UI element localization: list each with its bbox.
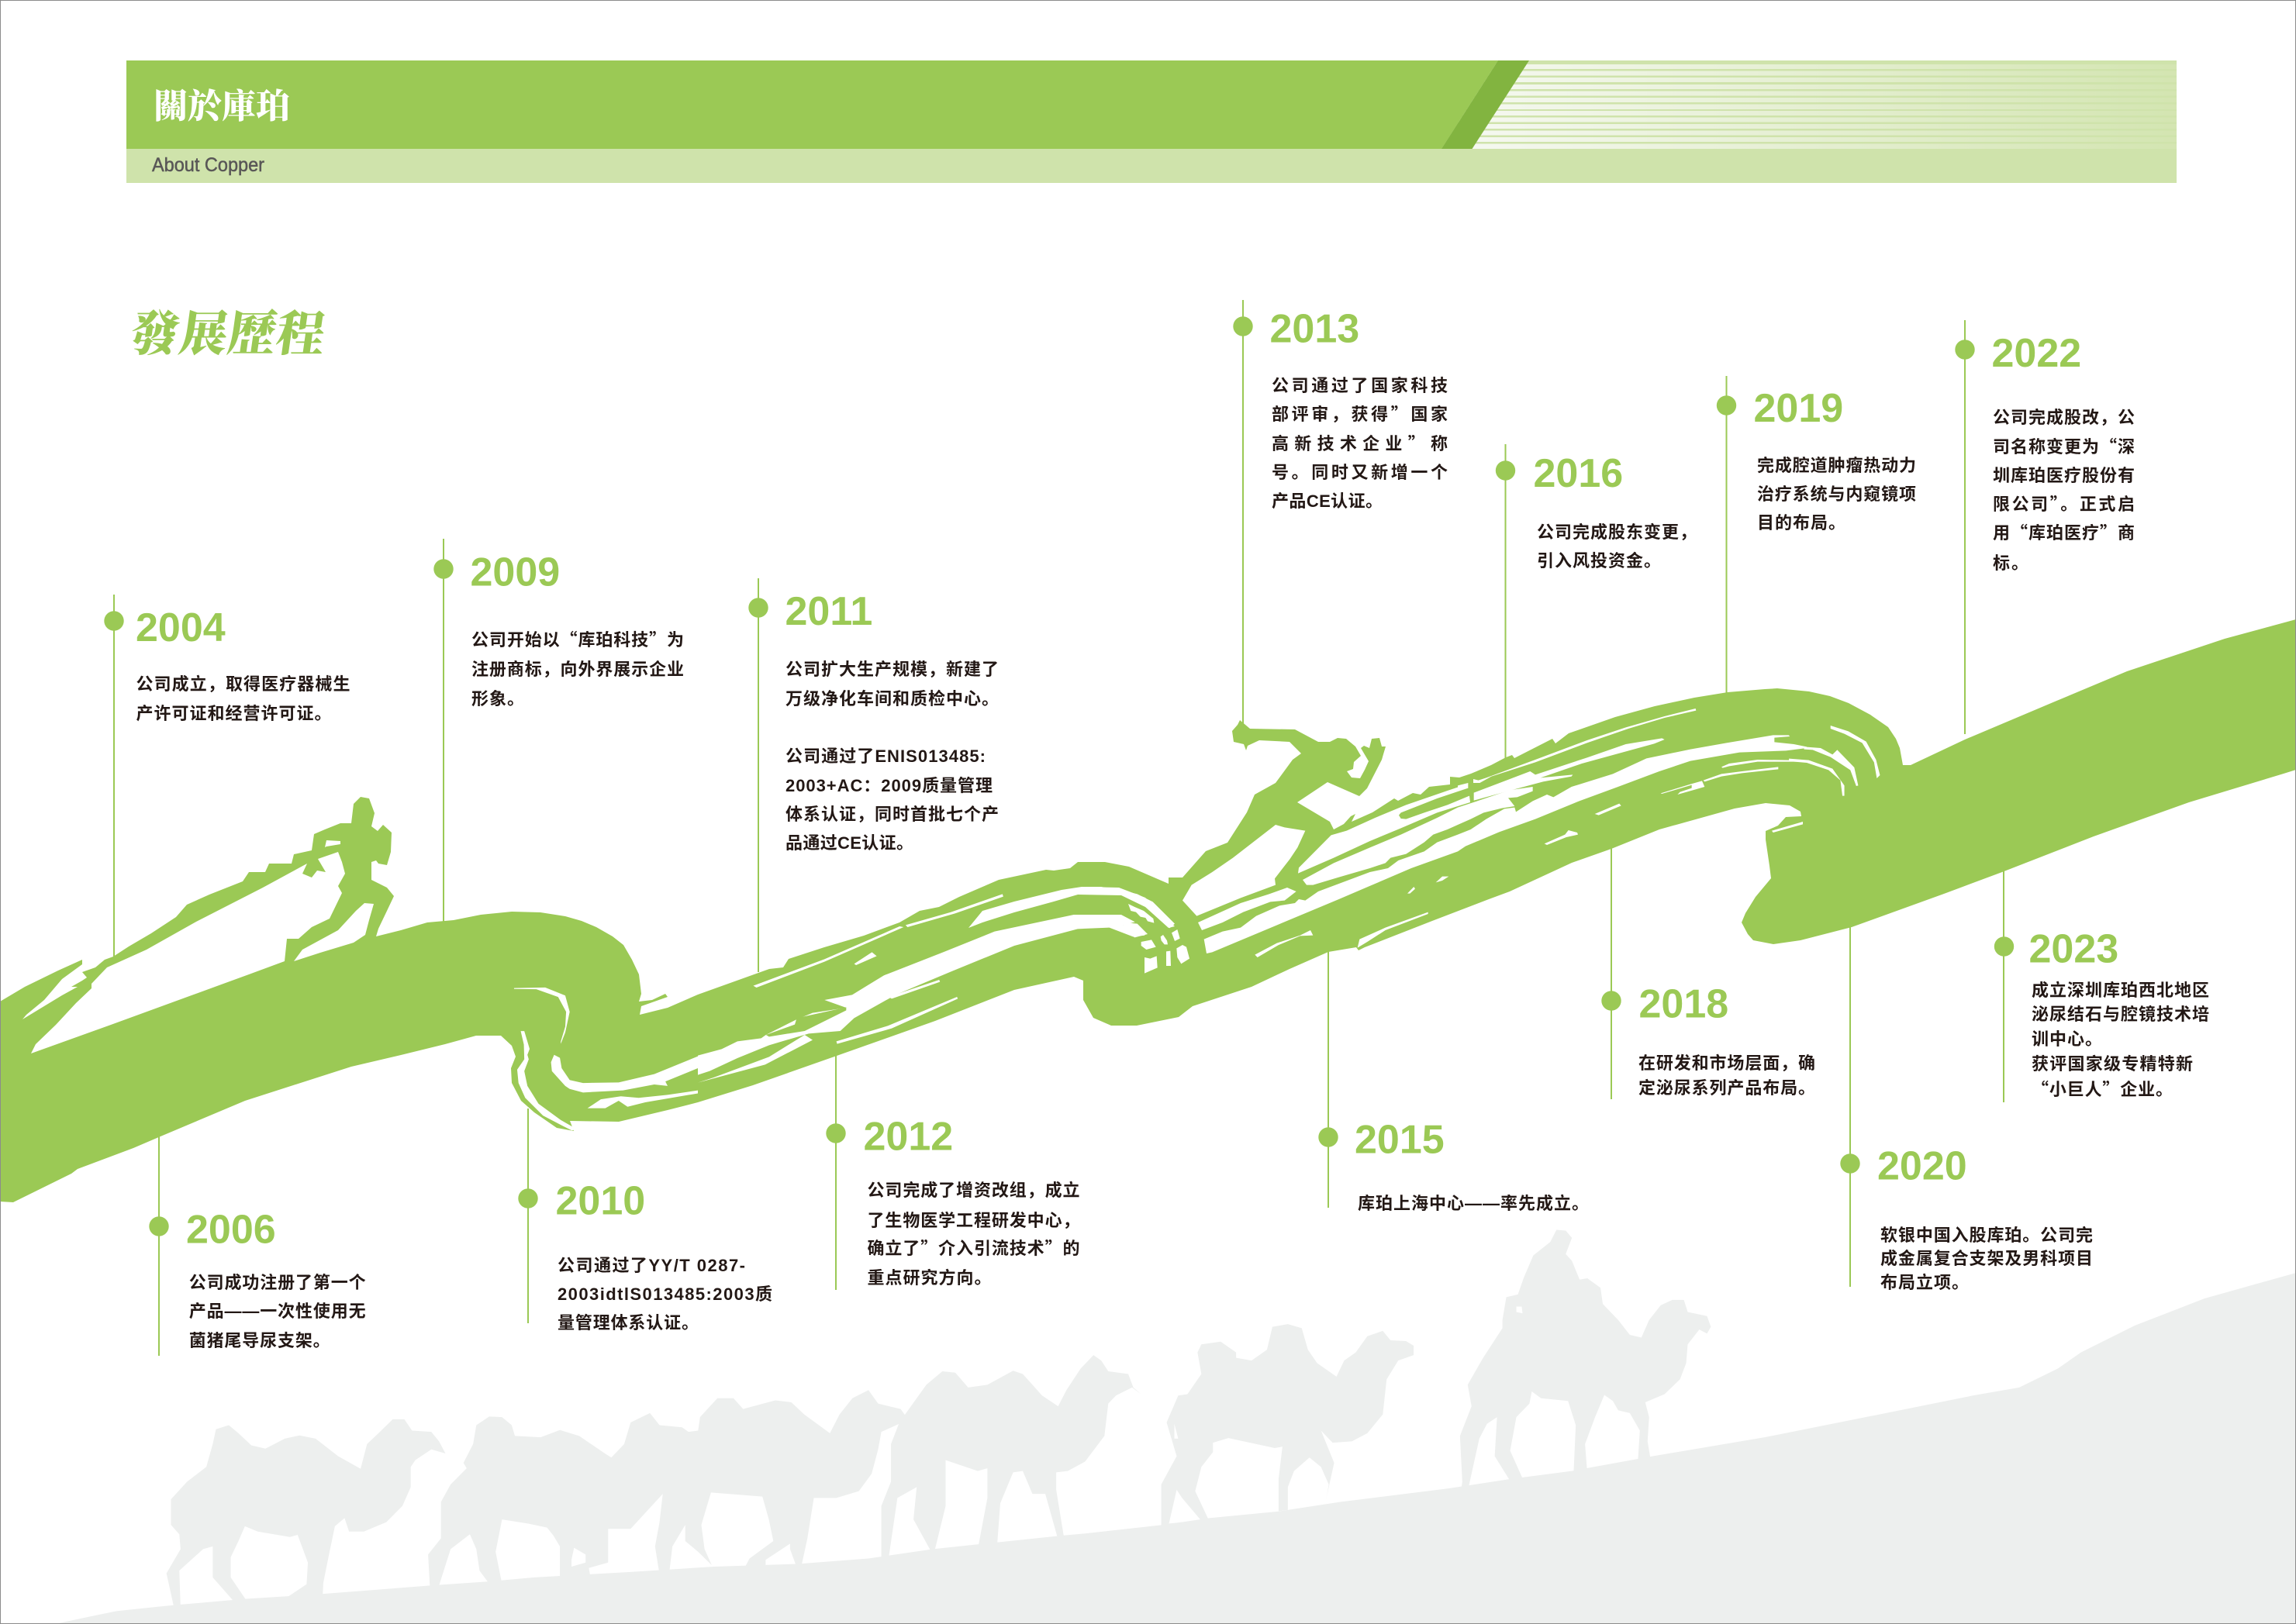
milestone 2010: 2010 bbox=[555, 1178, 645, 1223]
milestone 2006: 2006 bbox=[186, 1208, 276, 1253]
milestone 2009 bbox=[433, 539, 684, 922]
milestone 2022 bbox=[1955, 320, 2135, 734]
header banner bbox=[126, 60, 2177, 183]
camel four bbox=[882, 1355, 1141, 1564]
milestone 2019: 治疗系统与内窥镜项 bbox=[1757, 484, 1916, 504]
milestone 2010: 公司通过了YY/T 0287- bbox=[558, 1256, 745, 1275]
milestone 2010: 2003idtlS013485:2003质 bbox=[558, 1284, 772, 1304]
milestone 2023: 获评国家级专精特新 bbox=[2032, 1054, 2193, 1074]
upper sweep stripes bbox=[1458, 709, 1807, 851]
milestone 2010: 量管理体系认证。 bbox=[558, 1313, 699, 1333]
milestone 2022: 用“库珀医疗”商 bbox=[1993, 519, 2135, 544]
camel caravan silhouettes bbox=[58, 1229, 2296, 1624]
milestone 2015 bbox=[1318, 950, 1589, 1213]
milestone 2023: 2023 bbox=[2028, 927, 2118, 972]
milestone 2016: 引入风投资金。 bbox=[1537, 551, 1661, 571]
milestone 2019: 2019 bbox=[1754, 386, 1843, 431]
milestone 2015: 2015 bbox=[1355, 1118, 1445, 1163]
milestone 2016: 公司完成股东变更， bbox=[1537, 522, 1697, 542]
milestone 2016 bbox=[1496, 444, 1697, 760]
milestone 2006: 菌猪尾导尿支架。 bbox=[189, 1331, 330, 1350]
milestone 2013: 产品CE认证。 bbox=[1272, 491, 1383, 511]
milestone 2019: 目的布局。 bbox=[1757, 513, 1845, 533]
milestone 2023 bbox=[1994, 868, 2209, 1102]
milestone 2013: 号。同时又新增一个 bbox=[1272, 463, 1448, 482]
milestone 2006: 公司成功注册了第一个 bbox=[189, 1273, 366, 1292]
milestone 2020: 成金属复合支架及男科项目 bbox=[1880, 1249, 2093, 1268]
milestone 2022: 限公司”。正式启 bbox=[1993, 491, 2135, 515]
milestone 2023: 泌尿结石与腔镜技术培 bbox=[2032, 1005, 2209, 1024]
milestone 2011 bbox=[748, 578, 999, 972]
milestone 2004: 公司成立，取得医疗器械生 bbox=[136, 674, 350, 694]
milestone 2020 bbox=[1840, 924, 2093, 1292]
milestone 2022: 圳库珀医疗股份有 bbox=[1993, 466, 2135, 485]
milestone 2018: 2018 bbox=[1639, 981, 1728, 1026]
milestone 2011: 2011 bbox=[785, 589, 872, 634]
milestone 2009: 公司开始以“库珀科技”为 bbox=[471, 626, 684, 651]
title: about copper chinese: 關於庫珀 bbox=[154, 88, 290, 126]
milestone 2012 bbox=[826, 1039, 1079, 1290]
milestone 2013 bbox=[1233, 300, 1448, 724]
milestone 2006 bbox=[149, 1132, 366, 1356]
milestone 2015: 库珀上海中心——率先成立。 bbox=[1358, 1194, 1589, 1213]
milestone 2004: 2004 bbox=[136, 605, 226, 650]
milestone 2011: 体系认证，同时首批七个产 bbox=[785, 805, 999, 824]
milestone 2011: 2003+AC：2009质量管理 bbox=[785, 776, 993, 795]
camels one to three bbox=[167, 1355, 1141, 1608]
milestone 2009: 2009 bbox=[470, 550, 560, 595]
subtitle: about copper: About Copper bbox=[152, 154, 264, 176]
milestone 2019 bbox=[1717, 376, 1916, 695]
milestone 2018: 定泌尿系列产品布局。 bbox=[1638, 1078, 1815, 1098]
milestone 2012: 了生物医学工程研发中心， bbox=[867, 1211, 1079, 1230]
milestone 2012: 2012 bbox=[864, 1115, 953, 1160]
brush gaps in second bend bbox=[698, 894, 1145, 1083]
arc stripes bbox=[1086, 887, 1189, 974]
milestone 2011: 公司通过了ENIS013485: bbox=[785, 746, 986, 766]
green brush ribbon with running figures bbox=[0, 619, 2296, 1202]
milestone 2020: 软银中国入股库珀。公司完 bbox=[1880, 1226, 2093, 1245]
milestone 2023: 成立深圳库珀西北地区 bbox=[2032, 981, 2209, 1000]
milestone 2013: 2013 bbox=[1270, 307, 1359, 352]
milestone 2012: 重点研究方向。 bbox=[867, 1268, 991, 1288]
milestone 2023: “小巨人”企业。 bbox=[2032, 1076, 2173, 1101]
milestone 2022: 2022 bbox=[1991, 331, 2081, 376]
desert ground slope bbox=[58, 1273, 2296, 1624]
milestone 2009: 形象。 bbox=[471, 689, 524, 709]
heading: development history: 發展歷程 bbox=[127, 308, 329, 361]
milestone 2013: 部评审，获得”国家 bbox=[1272, 401, 1448, 426]
milestone 2018: 在研发和市场层面，确 bbox=[1638, 1053, 1815, 1073]
milestone 2022: 标。 bbox=[1993, 553, 2028, 573]
milestone 2012: 公司完成了增资改组，成立 bbox=[867, 1181, 1079, 1200]
milestone 2009: 注册商标，向外界展示企业 bbox=[471, 660, 684, 679]
camels with riders bbox=[1162, 1229, 1711, 1528]
milestone 2022: 公司完成股改，公 bbox=[1993, 408, 2135, 427]
milestone 2011: 万级净化车间和质检中心。 bbox=[785, 689, 999, 709]
milestone 2012: 确立了”介入引流技术”的 bbox=[867, 1235, 1079, 1260]
milestone 2018 bbox=[1601, 846, 1815, 1099]
milestone 2011: 品通过CE认证。 bbox=[785, 833, 913, 853]
milestone 2022: 司名称变更为“深 bbox=[1993, 433, 2135, 458]
brush slivers in first bend bbox=[514, 988, 698, 1130]
milestone 2006: 产品——一次性使用无 bbox=[189, 1302, 366, 1321]
milestone 2004 bbox=[104, 595, 350, 958]
milestone 2023: 训中心。 bbox=[2032, 1029, 2102, 1049]
milestone 2020: 布局立项。 bbox=[1880, 1273, 1969, 1292]
runner two leg gaps and stripes bbox=[1183, 785, 1470, 957]
milestone 2019: 完成腔道肿瘤热动力 bbox=[1757, 456, 1916, 475]
milestone 2011: 公司扩大生产规模，新建了 bbox=[785, 660, 999, 679]
milestone 2013: 公司通过了国家科技 bbox=[1272, 376, 1448, 395]
milestone 2004: 产许可证和经营许可证。 bbox=[136, 704, 332, 723]
milestone 2020: 2020 bbox=[1877, 1144, 1967, 1189]
milestone 2013: 高新技术企业”称 bbox=[1272, 430, 1448, 455]
milestone 2010 bbox=[518, 1109, 772, 1333]
milestone 2016: 2016 bbox=[1534, 451, 1623, 496]
